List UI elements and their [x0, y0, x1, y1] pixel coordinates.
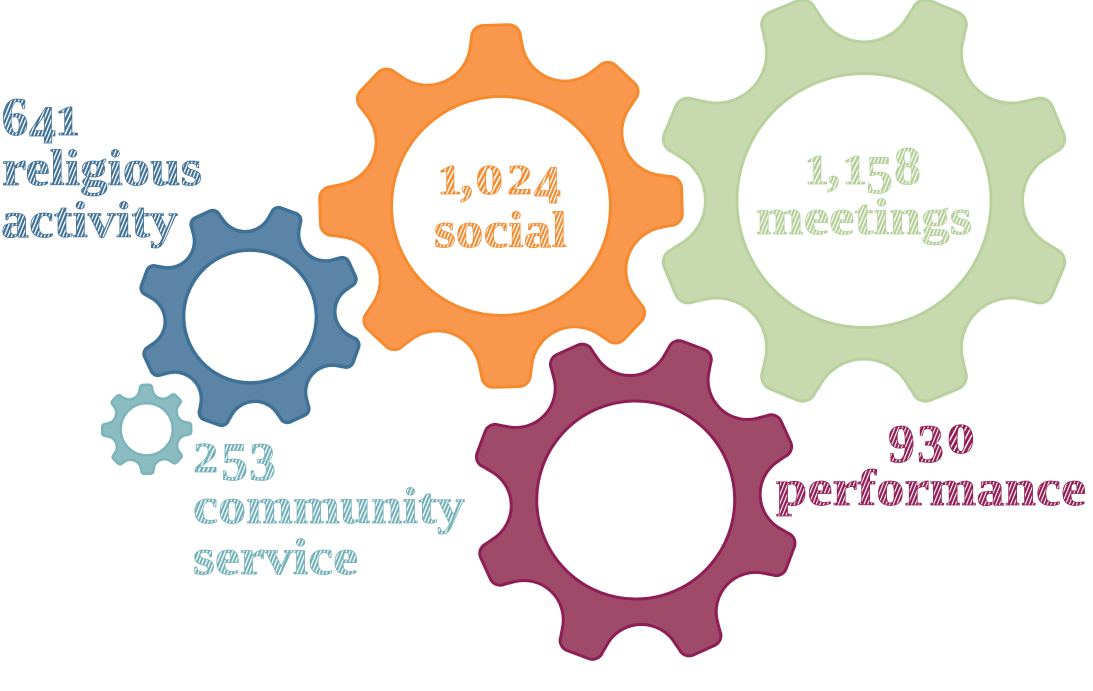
label: 1,024 social: , — [460, 146, 474, 206]
label: 253 community service — [193, 432, 465, 586]
label: 1,024 social — [434, 146, 567, 259]
label: 930 performance: performance — [776, 461, 1086, 517]
label: 1,158 meetings: 5 — [866, 145, 893, 205]
label: 253 community service: service — [193, 530, 358, 586]
label: 930 performance: 0 — [947, 415, 975, 462]
gear: meetings (green) — [590, 0, 1093, 475]
label: 1,158 meetings: , — [827, 136, 840, 196]
label: 930 performance — [776, 414, 1086, 517]
label: 1,024 social: 1 — [437, 158, 462, 204]
gear: social (orange) — [315, 20, 687, 392]
label: 930 performance: 3 — [917, 414, 944, 474]
label: 641 religious activity: activity — [1, 193, 178, 249]
label: 253 community service: community — [193, 479, 465, 535]
label: 641 religious activity: 6 — [2, 87, 28, 147]
label: 1,158 meetings: 1 — [842, 148, 867, 194]
label: 641 religious activity: religious — [2, 141, 202, 197]
label: 1,024 social: 0 — [476, 156, 503, 203]
label: 1,158 meetings: 8 — [894, 136, 921, 196]
label: 1,024 social: 2 — [507, 158, 532, 204]
label: 253 community service: 5 — [221, 432, 248, 492]
label: 1,158 meetings: 1 — [804, 148, 829, 194]
gear: religious activity (blue) — [106, 172, 394, 461]
gear: community service (teal) — [101, 384, 192, 475]
gear: performance (maroon) — [423, 288, 848, 691]
label: 641 religious activity: 4 — [29, 95, 56, 155]
label: 1,024 social: social — [434, 203, 567, 259]
label: 641 religious activity — [1, 87, 202, 249]
label: 253 community service: 3 — [249, 432, 276, 492]
label: 1,158 meetings: meetings — [756, 190, 972, 246]
label: 930 performance: 9 — [888, 414, 915, 474]
label: 253 community service: 2 — [193, 436, 218, 482]
label: 641 religious activity: 1 — [55, 99, 80, 145]
label: 1,024 social: 4 — [534, 155, 561, 215]
label: 1,158 meetings — [756, 136, 972, 246]
